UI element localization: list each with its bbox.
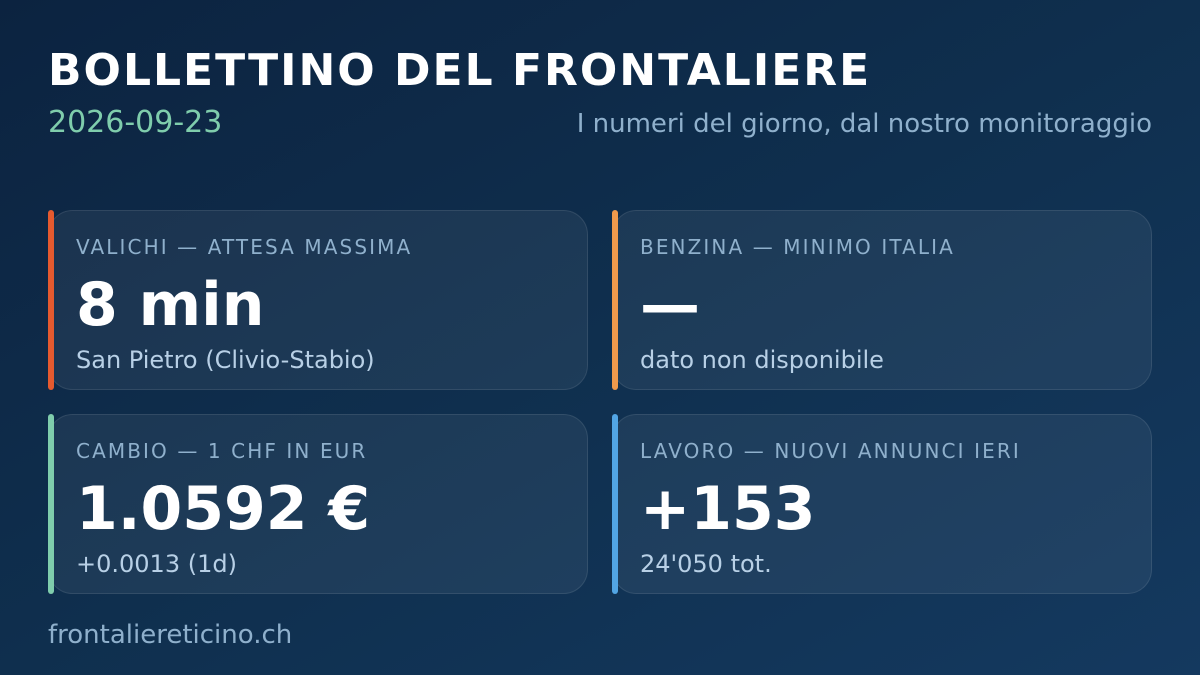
panel: valichi: 8 min xyxy=(76,270,264,340)
subtitle: I numeri del giorno, dal nostro monitoraggio xyxy=(577,109,1152,139)
panel: benzina xyxy=(612,210,1152,390)
panel: valichi: VALICHI — ATTESA MASSIMA xyxy=(76,235,412,259)
panel: valichi xyxy=(48,210,588,390)
panel: lavoro: 24'050 tot. xyxy=(640,550,772,578)
title: BOLLETTINO DEL FRONTALIERE xyxy=(48,45,871,96)
panel: cambio: CAMBIO — 1 CHF IN EUR xyxy=(76,439,367,463)
footer: frontaliereticino.ch xyxy=(48,620,292,650)
panel: lavoro: LAVORO — NUOVI ANNUNCI IERI xyxy=(640,439,1021,463)
panel: valichi: San Pietro (Clivio-Stabio) xyxy=(76,346,375,374)
panel: cambio: +0.0013 (1d) xyxy=(76,550,237,578)
panel: benzina: BENZINA — MINIMO ITALIA xyxy=(640,235,955,259)
panel: lavoro xyxy=(612,414,1152,594)
date: 2026-09-23 xyxy=(48,105,222,140)
panel: benzina: — xyxy=(640,270,700,340)
panel: cambio xyxy=(48,414,588,594)
panel: benzina: dato non disponibile xyxy=(640,346,884,374)
panel: cambio: 1.0592 € xyxy=(76,474,370,544)
panel: lavoro: +153 xyxy=(640,474,816,544)
